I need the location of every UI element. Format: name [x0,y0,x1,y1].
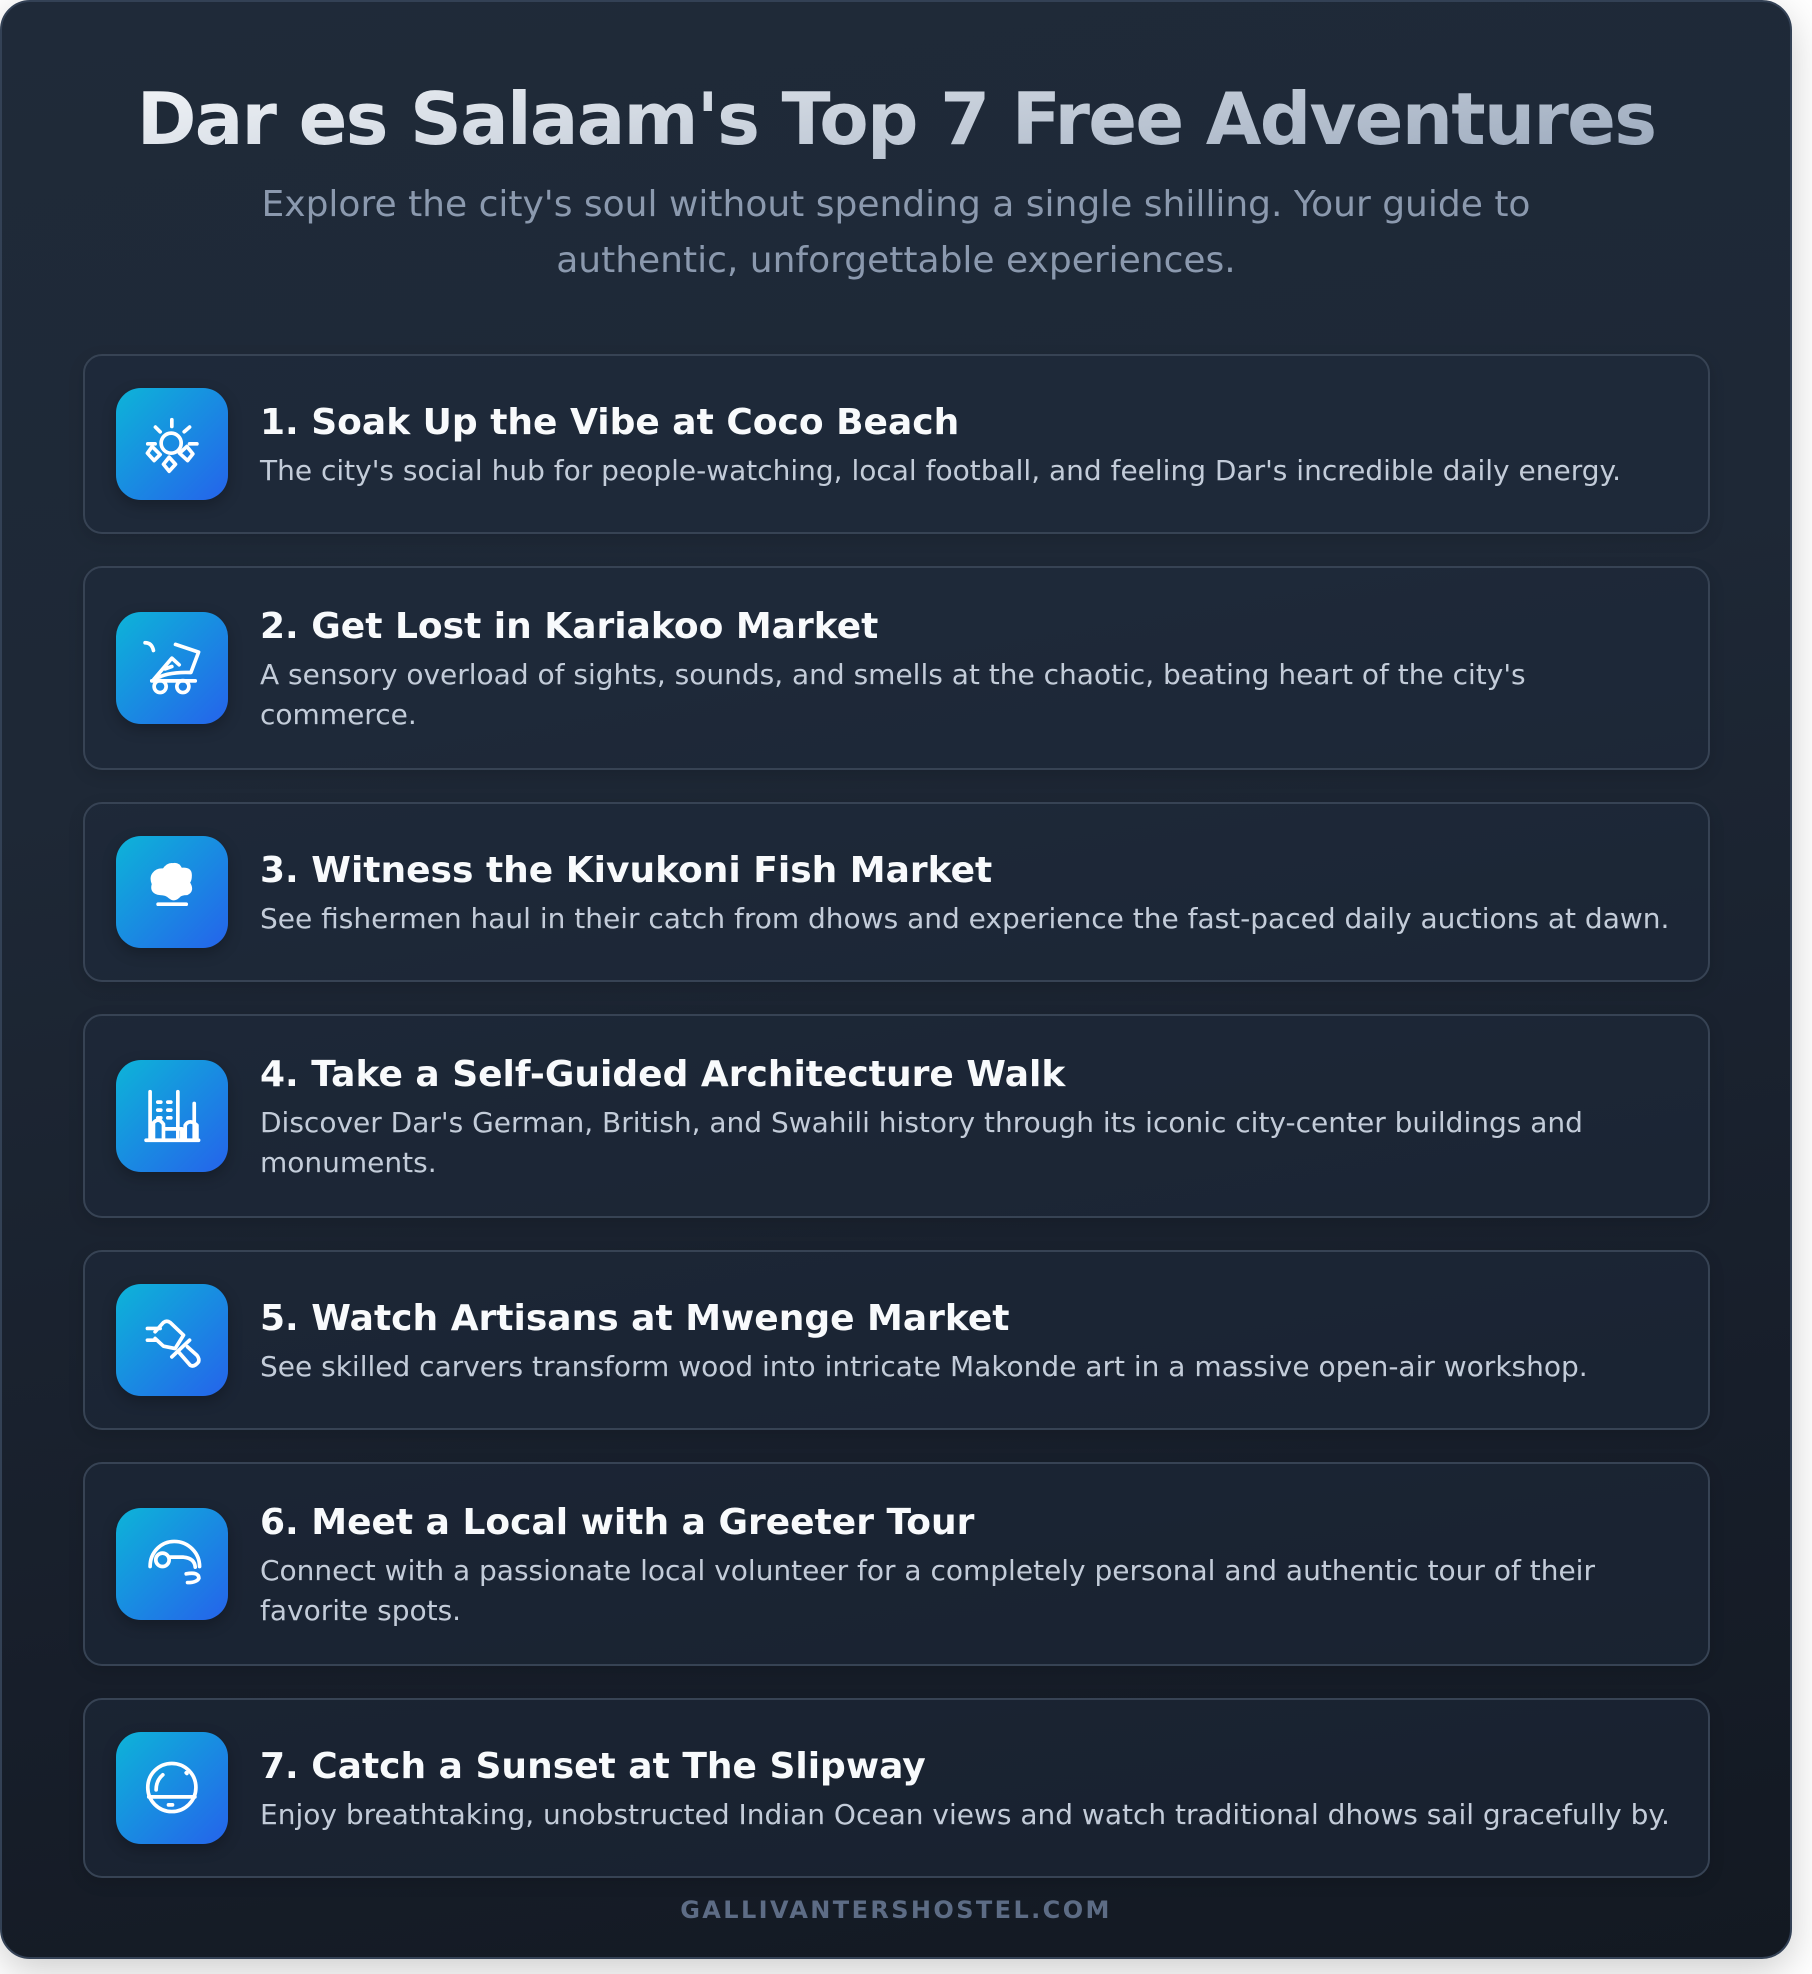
text: item 6: 6. Meet a Local with a Greeter Tour [260,1502,974,1543]
text: item 2 [260,606,1526,731]
card 2: Kariakoo Market [83,566,1710,770]
text: item 1 [260,402,1621,487]
text: item 6: Connect with a passionate local volunteer for a completely personal and authentic tour of their [260,1554,1595,1587]
text: item 2: A sensory overload of sights, sounds, and smells at the chaotic, beating heart of the city's [260,658,1526,691]
text: item 7: Enjoy breathtaking, unobstructed Indian Ocean views and watch traditional dhows sail gracefully by. [260,1798,1670,1831]
icon: fish market shell [116,836,228,948]
icon: sunset globe [116,1732,228,1844]
text: item 3: 3. Witness the Kivukoni Fish Market [260,850,992,891]
text: item 2: commerce. [260,698,417,731]
text: item 3 [260,850,1669,935]
text: item 1: The city's social hub for people-watching, local football, and feeling Dar's incredible daily energy. [260,454,1621,487]
text: item 5: See skilled carvers transform wood into intricate Makonde art in a massive open-air workshop. [260,1350,1588,1383]
subtitle: Explore the city's soul without spending a single shilling. Your guide to [262,184,1530,225]
text: item 5: 5. Watch Artisans at Mwenge Market [260,1298,1010,1339]
icon: greeter [116,1508,228,1620]
text: item 3: See fishermen haul in their catch from dhows and experience the fast-paced daily auctions at dawn. [260,902,1669,935]
card 7: The Slipway [83,1698,1710,1878]
title: Dar es Salaam's Top 7 Free Adventures [137,77,1655,161]
card 4: Architecture Walk [83,1014,1710,1218]
text: item 6 [260,1502,1595,1627]
card 1: Coco Beach [83,354,1710,534]
text: item 2: 2. Get Lost in Kariakoo Market [260,606,878,647]
icon: carving tool [116,1284,228,1396]
text: item 7 [260,1746,1670,1831]
footer: website: GALLIVANTERSHOSTEL.COM [680,1896,1112,1924]
icon: sun and shells [116,388,228,500]
icon: market cart [116,612,228,724]
text: item 4: Discover Dar's German, British, and Swahili history through its iconic city-center buildings and [260,1106,1583,1139]
text: item 4: 4. Take a Self-Guided Architecture Walk [260,1054,1065,1095]
text: item 1: 1. Soak Up the Vibe at Coco Beach [260,402,959,443]
text: item 4 [260,1054,1583,1179]
subtitle: authentic, unforgettable experiences. [556,240,1236,281]
icon: city buildings [116,1060,228,1172]
card 3: Kivukoni Fish Market [83,802,1710,982]
text: item 4: monuments. [260,1146,437,1179]
card 5: Mwenge Market [83,1250,1710,1430]
text: item 7: 7. Catch a Sunset at The Slipway [260,1746,926,1787]
subtitle [262,184,1530,281]
card 6: Greeter Tour [83,1462,1710,1666]
text: item 6: favorite spots. [260,1594,461,1627]
text: item 5 [260,1298,1588,1383]
